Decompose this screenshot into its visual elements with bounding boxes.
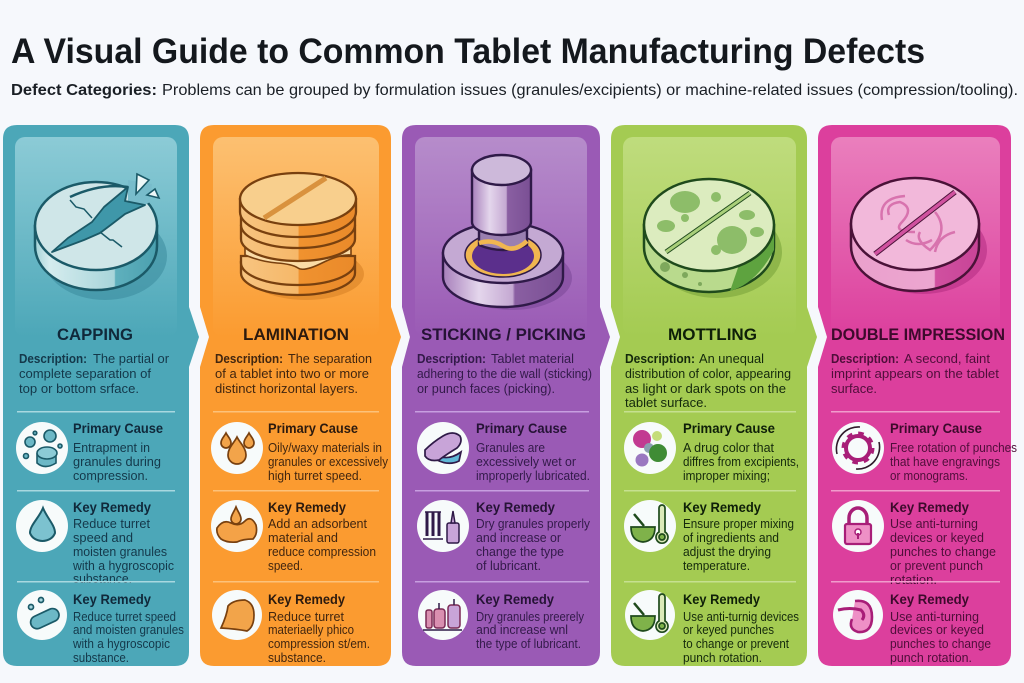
text: key remedy 2: punch rotation. xyxy=(683,650,762,665)
primary cause: lamination xyxy=(211,421,388,483)
text: key remedy: or prevent punch xyxy=(890,558,983,573)
icon: test tubes and bottle xyxy=(417,500,469,552)
description: capping: top or bottom srface. xyxy=(19,381,139,396)
text: key remedy: speed and xyxy=(73,530,133,545)
description: double impression: A second, faint xyxy=(904,351,990,366)
key remedy 2: mottling xyxy=(625,590,799,665)
text: key remedy 2: Dry granules preerely xyxy=(476,609,584,624)
heading: sticking / picking: STICKING / PICKING xyxy=(421,325,586,344)
text: key remedy xyxy=(268,500,376,573)
text: key remedy 2 xyxy=(890,592,991,665)
text: primary cause xyxy=(73,421,163,483)
icon: lubricant bottles xyxy=(418,590,468,640)
text: key remedy 2: to change or prevent xyxy=(683,636,789,651)
text: key remedy: Key Remedy xyxy=(73,500,151,515)
description: sticking / picking: adhering to the die wall (sticking) xyxy=(417,366,592,381)
text: key remedy: Key Remedy xyxy=(890,500,969,515)
key remedy: double impression xyxy=(832,500,996,587)
panel: mottling xyxy=(611,125,817,666)
text: key remedy 2 xyxy=(268,592,370,665)
text: key remedy: devices or keyed xyxy=(890,530,984,545)
description: mottling: distribution of color, appearing xyxy=(625,366,791,381)
text: key remedy 2: Key Remedy xyxy=(73,592,151,607)
text: key remedy: rotation. xyxy=(890,572,937,587)
description: mottling: Description: xyxy=(625,351,695,366)
icon: keyed punch swirl xyxy=(833,590,883,640)
description: double impression: imprint appears on the tablet xyxy=(831,366,999,381)
description: capping: The partial or xyxy=(93,351,170,366)
text: key remedy: Key Remedy xyxy=(476,500,555,515)
icon: trapped air bubbles xyxy=(16,422,68,474)
text: primary cause: diffres from excipients, xyxy=(683,454,799,469)
panel: capping xyxy=(3,125,199,666)
key remedy: mottling xyxy=(624,500,794,573)
heading: lamination: LAMINATION xyxy=(243,325,349,344)
text: primary cause: granules during xyxy=(73,454,161,469)
text: key remedy: Add an adsorbent xyxy=(268,516,367,531)
text: key remedy: material and xyxy=(268,530,338,545)
primary cause: mottling xyxy=(624,421,799,483)
text: key remedy: punches to change xyxy=(890,544,996,559)
text: primary cause: improper mixing; xyxy=(683,468,770,483)
icon: mottled tablet xyxy=(644,179,782,298)
key remedy 2: double impression xyxy=(833,590,991,665)
description: double impression: Description: xyxy=(831,351,899,366)
text: primary cause: Primary Cause xyxy=(683,421,775,436)
text: primary cause: Primary Cause xyxy=(476,421,567,436)
text: key remedy 2 xyxy=(476,592,584,651)
icon: wet sponge xyxy=(417,422,469,474)
text: primary cause: A drug color that xyxy=(683,440,774,455)
key remedy 2: sticking / picking xyxy=(418,590,584,651)
description: double impression xyxy=(831,351,999,396)
text: key remedy: substance. xyxy=(73,571,132,586)
text: key remedy 2: Reduce turret xyxy=(268,609,344,624)
text: key remedy xyxy=(890,500,996,587)
text: key remedy 2: devices or keyed xyxy=(890,622,984,637)
description: sticking / picking: Tablet material xyxy=(491,351,574,366)
text: key remedy: speed. xyxy=(268,558,303,573)
text: primary cause: Entrapment in xyxy=(73,440,150,455)
text: primary cause: granules or excessively xyxy=(268,454,388,469)
icon: cracked tablet xyxy=(35,174,167,300)
text: key remedy: with a hygroscopic xyxy=(72,558,174,573)
description: mottling: tablet surface. xyxy=(625,395,707,410)
key remedy 2: capping xyxy=(17,590,184,665)
text: primary cause: that have engravings xyxy=(890,454,1000,469)
text: primary cause: Primary Cause xyxy=(268,421,358,436)
description: double impression: surface. xyxy=(831,381,877,396)
text: primary cause xyxy=(890,421,1017,483)
panel: lamination xyxy=(200,125,401,666)
text: key remedy: Use anti-turning xyxy=(890,516,978,531)
description: sticking / picking: or punch faces (picking). xyxy=(417,381,555,396)
text: primary cause: Oily/waxy materials in xyxy=(268,440,382,455)
text: primary cause xyxy=(683,421,799,483)
heading: double impression: DOUBLE IMPRESSION xyxy=(831,325,1005,344)
description: lamination: distinct horizontal layers. xyxy=(215,381,358,396)
text: key remedy: Dry granules properly xyxy=(476,516,590,531)
text: primary cause: Primary Cause xyxy=(73,421,163,436)
text: key remedy xyxy=(476,500,590,573)
text: key remedy 2 xyxy=(683,592,799,665)
text: key remedy 2: Key Remedy xyxy=(890,592,969,607)
description: lamination xyxy=(215,351,372,396)
text: key remedy 2: Use anti-turnig devices xyxy=(683,609,799,624)
description: mottling: as light or dark spots on the xyxy=(625,381,786,396)
text: key remedy 2: punches to change xyxy=(890,636,991,651)
text: key remedy 2: Use anti-turning xyxy=(890,609,979,624)
description: lamination: of a tablet into two or more xyxy=(215,366,369,381)
text: key remedy 2: substance. xyxy=(73,650,129,665)
description: mottling: An unequal xyxy=(699,351,764,366)
text: key remedy 2: compression st/em. xyxy=(268,636,370,651)
text: key remedy 2: with a hygroscopic xyxy=(72,636,170,651)
icon: punch sticking in die xyxy=(443,155,572,310)
icon: water drop xyxy=(16,500,68,552)
primary cause: capping xyxy=(16,421,163,483)
title: A Visual Guide to Common Tablet Manufacturing Defects xyxy=(11,31,925,71)
icon: rotating gear xyxy=(832,422,884,474)
text: key remedy 2: materiaelly phico xyxy=(268,622,354,637)
panel: sticking / picking xyxy=(402,125,610,666)
icon: laminated tablet stack xyxy=(240,173,364,300)
text: key remedy 2: Key Remedy xyxy=(268,592,345,607)
subtitle: defect categories: Defect Categories: xyxy=(11,82,157,99)
text: key remedy 2: substance. xyxy=(268,650,326,665)
text: key remedy 2: and increase wnl xyxy=(476,622,568,637)
text: key remedy 2: the type of lubricant. xyxy=(476,636,581,651)
description: lamination: The separation xyxy=(288,351,372,366)
text: key remedy 2: Key Remedy xyxy=(476,592,554,607)
icon: bowl and thermometer 2 xyxy=(625,590,675,640)
icon: colour swatches xyxy=(624,422,676,474)
description: capping: Description: xyxy=(19,351,87,366)
icon: oil drops xyxy=(211,422,263,474)
icon: bowl and thermometer xyxy=(624,500,676,552)
text: primary cause: Primary Cause xyxy=(890,421,982,436)
text: primary cause xyxy=(476,421,590,483)
text: key remedy: Ensure proper mixing xyxy=(683,516,794,531)
subtitle: defect categories: Problems can be grouped by formulation issues (granules/excipients) or machine-related issues (compression/tooling). xyxy=(162,82,1018,99)
text: primary cause: improperly lubricated. xyxy=(476,468,590,483)
description: lamination: Description: xyxy=(215,351,283,366)
text: key remedy: of ingredients and xyxy=(683,530,779,545)
description: mottling xyxy=(625,351,791,410)
text: primary cause: excessively wet or xyxy=(476,454,577,469)
description: capping xyxy=(19,351,170,396)
key remedy: lamination xyxy=(211,500,376,573)
text: primary cause xyxy=(268,421,388,483)
text: key remedy: and increase or xyxy=(476,530,562,545)
text: key remedy: reduce compression xyxy=(268,544,376,559)
key remedy: sticking / picking xyxy=(417,500,590,573)
text: primary cause: Granules are xyxy=(476,440,545,455)
text: key remedy: Key Remedy xyxy=(683,500,761,515)
primary cause: double impression xyxy=(832,421,1017,483)
text: key remedy 2: Reduce turret speed xyxy=(73,609,176,624)
primary cause: sticking / picking xyxy=(417,421,590,483)
panel: double impression xyxy=(818,125,1017,666)
text: primary cause: compression. xyxy=(73,468,148,483)
text: key remedy: adjust the drying xyxy=(683,544,771,559)
icon: double-imprinted tablet xyxy=(851,178,987,294)
text: key remedy xyxy=(683,500,794,573)
text: key remedy 2: and moisten granules xyxy=(73,622,184,637)
text: key remedy: moisten granules xyxy=(73,544,167,559)
text: key remedy xyxy=(72,500,174,586)
text: key remedy: temperature. xyxy=(683,558,750,573)
text: key remedy 2: Key Remedy xyxy=(683,592,760,607)
heading: capping: CAPPING xyxy=(57,325,133,344)
text: key remedy: change the type xyxy=(476,544,564,559)
text: primary cause: high turret speed. xyxy=(268,468,362,483)
description: capping: complete separation of xyxy=(19,366,151,381)
icon: peeling layer xyxy=(212,590,262,640)
description: sticking / picking xyxy=(417,351,592,396)
icon: sponge with drop xyxy=(211,500,263,552)
key remedy 2: lamination xyxy=(212,590,370,665)
icon: padlock xyxy=(832,500,884,552)
description: sticking / picking: Description: xyxy=(417,351,486,366)
heading: mottling: MOTTLING xyxy=(668,325,757,344)
text: key remedy 2 xyxy=(72,592,184,665)
text: primary cause: or monograms. xyxy=(890,468,968,483)
text: key remedy 2: or keyed punches xyxy=(683,622,774,637)
text: key remedy 2: punch rotation. xyxy=(890,650,972,665)
text: key remedy: Key Remedy xyxy=(268,500,346,515)
text: key remedy: Reduce turret xyxy=(73,516,150,531)
key remedy: capping xyxy=(16,500,174,586)
icon: broken capsule xyxy=(17,590,67,640)
text: key remedy: of lubricant. xyxy=(476,558,541,573)
